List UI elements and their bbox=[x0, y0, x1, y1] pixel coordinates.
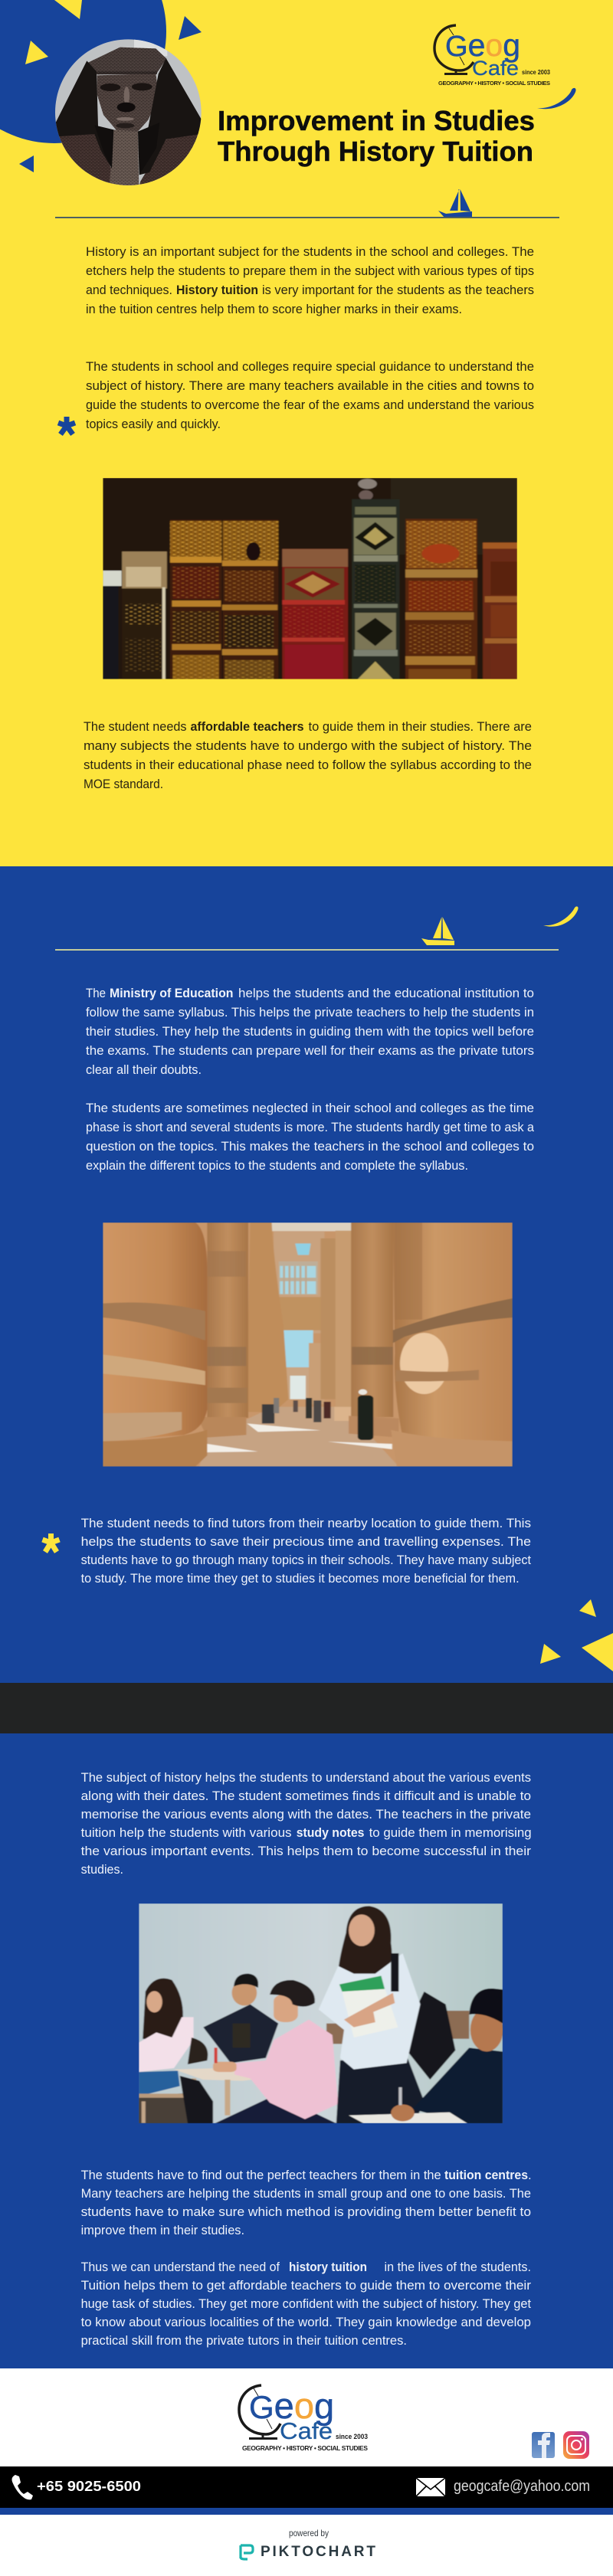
text: affordable teachers paragraph: The student needs bbox=[84, 720, 187, 734]
text: neglected students paragraph: phase is short and several students is more. The students hardly get time to ask a bbox=[86, 1121, 535, 1134]
text: tuition centres paragraph bbox=[81, 2168, 532, 2237]
decorative swoosh blue bbox=[537, 88, 576, 109]
text: intro paragraph 1: is very important for the students as the teachers bbox=[262, 283, 534, 297]
text: affordable teachers paragraph: affordable teachers bbox=[190, 720, 303, 734]
text: tuition centres paragraph: The students have to find out the perfect teachers for them in the bbox=[81, 2168, 441, 2182]
text: affordable teachers paragraph bbox=[84, 720, 532, 791]
sub: background chairs bbox=[326, 2010, 470, 2044]
blue footer stripe bbox=[0, 2508, 613, 2515]
sub: left woman bbox=[139, 1979, 199, 2123]
text: Ministry of Education paragraph: follow the same syllabus. This helps the private teachers to help the students in bbox=[86, 1006, 534, 1020]
text: nearby tutors paragraph: helps the students to save their precious time and travelling expenses. The bbox=[81, 1535, 531, 1549]
text: subject of history paragraph bbox=[81, 1771, 532, 1877]
divider line yellow section bbox=[55, 217, 559, 218]
panel: white credit area bbox=[0, 2515, 613, 2576]
text: subject of history paragraph: the various important events. This helps them to become successful in their bbox=[81, 1844, 532, 1858]
sub: book 5 bbox=[282, 549, 348, 679]
image: students in classroom bbox=[139, 1903, 503, 2123]
text: tuition centres paragraph: improve them in their studies. bbox=[81, 2224, 244, 2237]
text: intro paragraph 1: and techniques. bbox=[86, 283, 172, 297]
text: Ministry of Education paragraph: helps the students and the educational institution to bbox=[238, 987, 534, 1000]
text: subject of history paragraph: study notes bbox=[297, 1826, 365, 1840]
text: tuition centres paragraph: tuition centres bbox=[444, 2168, 528, 2182]
icon: instagram bbox=[563, 2431, 589, 2459]
text: Ministry of Education paragraph: Ministry of Education bbox=[110, 987, 233, 1000]
sub: book 6 bbox=[352, 499, 399, 679]
sub: desk bbox=[175, 2038, 251, 2123]
text: subject of history paragraph: to guide them in memorising bbox=[369, 1826, 532, 1840]
text: subject of history paragraph: along with their dates. The student sometimes finds it difficult and is unable to bbox=[81, 1789, 531, 1803]
sub: right man writing bbox=[349, 1988, 503, 2123]
divider line blue section bbox=[55, 949, 559, 951]
icon: facebook bbox=[532, 2432, 555, 2458]
image: Egyptian temple columns bbox=[103, 1223, 513, 1467]
text: conclusion paragraph bbox=[81, 2260, 532, 2348]
image: pharaoh statue in circle bbox=[54, 38, 205, 186]
sub: seated man bbox=[203, 1974, 278, 2063]
text: affordable teachers paragraph: to guide them in their studies. There are bbox=[308, 720, 532, 734]
text: neglected students paragraph: question on the topics. This makes the teachers in the school and colleges to bbox=[86, 1140, 534, 1154]
text: intro paragraph 2: topics easily and quickly. bbox=[86, 417, 221, 431]
text: intro paragraph 2: subject of history. There are many teachers available in the cities and towns to bbox=[86, 379, 534, 393]
logo: Geog Cafe footer: Cafe bbox=[280, 2417, 333, 2444]
text: conclusion paragraph: practical skill from the private tutors in their tuition centres. bbox=[81, 2334, 407, 2348]
sub: big right column bbox=[391, 1223, 513, 1467]
text: tuition centres paragraph: students have to make sure which method is providing them better benefit to bbox=[81, 2205, 531, 2219]
icon: blue sailboat bbox=[438, 189, 472, 218]
text: email: geogcafe@yahoo.com bbox=[454, 2478, 590, 2495]
image: antique books bbox=[103, 478, 517, 679]
logo: Geog Cafe footer: since 2003 bbox=[336, 2433, 368, 2441]
text: Ministry of Education paragraph: clear all their doubts. bbox=[86, 1063, 202, 1077]
decorative header shapes: blue circle and triangles bbox=[0, 0, 202, 172]
text: conclusion paragraph: in the lives of the students. bbox=[385, 2260, 531, 2274]
text: intro paragraph 1: History tuition bbox=[176, 283, 258, 297]
text: subject of history paragraph: memorise the various events along with the dates. The teachers in the private bbox=[81, 1808, 531, 1822]
title: Improvement in Studies bbox=[218, 105, 535, 136]
icon: blue asterisk bbox=[58, 417, 75, 434]
logo: Geog Cafe header: Geog bbox=[445, 28, 520, 63]
text: neglected students paragraph bbox=[86, 1101, 535, 1173]
sub: people bbox=[262, 1389, 373, 1440]
logo: Geog Cafe footer: GEOGRAPHY • HISTORY • SOCIAL STUDIES bbox=[242, 2444, 368, 2452]
sub: book 4 bbox=[222, 519, 278, 679]
text: subject of history paragraph: studies. bbox=[81, 1863, 123, 1877]
text: conclusion paragraph: huge task of studies. They get more confident with the subject of history. They get bbox=[81, 2297, 531, 2311]
text: Ministry of Education paragraph: The bbox=[86, 987, 106, 1000]
logo: Geog Cafe header: GEOGRAPHY • HISTORY • SOCIAL STUDIES bbox=[438, 80, 550, 87]
sub: book 7 bbox=[405, 519, 477, 679]
icon: yellow asterisk bbox=[43, 1533, 60, 1552]
text: intro paragraph 1 bbox=[86, 245, 534, 316]
logo: Piktochart: PIKTOCHART bbox=[261, 2544, 375, 2560]
logo: Geog Cafe footer: Geog bbox=[249, 2385, 334, 2426]
text: nearby tutors paragraph: students have to go through many topics in their schools. They have many subject bbox=[81, 1553, 531, 1567]
icon: yellow sailboat bbox=[421, 917, 454, 945]
sub: centre woman in pink bbox=[213, 1980, 338, 2123]
sub: standing woman with books and backpack bbox=[319, 1906, 455, 2123]
sub: book 3 bbox=[170, 519, 221, 679]
text: affordable teachers paragraph: MOE standard. bbox=[84, 777, 163, 791]
text: affordable teachers paragraph: students in their educational phase need to follow the syllabus according to the bbox=[84, 758, 532, 772]
dark band bbox=[0, 1683, 613, 1733]
panel: blue lower section bbox=[0, 1733, 613, 2368]
text: neglected students paragraph: explain the different topics to the students and complete the syllabus. bbox=[86, 1159, 468, 1173]
text: intro paragraph 1: History is an important subject for the students in the school and colleges. The bbox=[86, 245, 534, 259]
sub: left centre columns bbox=[198, 1223, 289, 1438]
text: conclusion paragraph: Tuition helps them to get affordable teachers to guide them to overcome their bbox=[81, 2279, 532, 2293]
text: conclusion paragraph: Thus we can understand the need of bbox=[81, 2260, 280, 2274]
icon: envelope bbox=[416, 2478, 445, 2496]
text: Ministry of Education paragraph bbox=[86, 987, 534, 1077]
text: tuition centres paragraph: . bbox=[528, 2168, 532, 2182]
text: neglected students paragraph: The students are sometimes neglected in their school and colleges as the time bbox=[86, 1101, 534, 1115]
text: tuition centres paragraph: Many teachers are helping the students in small group and one to one basis. The bbox=[81, 2187, 531, 2201]
logo: Geog Cafe header: since 2003 bbox=[522, 68, 550, 76]
decorative swoosh yellow bbox=[543, 906, 579, 927]
text: conclusion paragraph: history tuition bbox=[289, 2260, 367, 2274]
text: intro paragraph 2: The students in school and colleges require special guidance to understand the bbox=[86, 360, 534, 374]
text: nearby tutors paragraph: to study. The more time they get to studies it becomes more beneficial for them. bbox=[81, 1572, 520, 1586]
sub: book 2 bbox=[122, 552, 167, 679]
sub: right columns bbox=[309, 1223, 398, 1438]
text: phone number: +65 9025-6500 bbox=[37, 2479, 141, 2494]
panel: black contact bar bbox=[0, 2466, 613, 2508]
panel: blue middle section bbox=[0, 866, 613, 1683]
text: nearby tutors paragraph: The student needs to find tutors from their nearby location to guide them. This bbox=[81, 1517, 531, 1530]
panel: yellow intro section bbox=[0, 0, 613, 866]
text: nearby tutors paragraph bbox=[81, 1517, 531, 1586]
text: Ministry of Education paragraph: their studies. They help the students in guiding them with the topics well before bbox=[86, 1025, 534, 1039]
sub: big left column bbox=[103, 1223, 207, 1467]
text: subject of history paragraph: tuition help the students with various bbox=[81, 1826, 292, 1840]
panel: white footer logo area bbox=[0, 2368, 613, 2466]
title: Through History Tuition bbox=[218, 136, 533, 167]
text: Ministry of Education paragraph: the exams. The students can prepare well for their exams as the private tutors bbox=[86, 1044, 534, 1058]
text: conclusion paragraph: to know about various localities of the world. They gain knowledge and develop bbox=[81, 2316, 531, 2329]
text: powered by: powered by bbox=[289, 2528, 329, 2538]
logo: Geog Cafe footer bbox=[239, 2385, 368, 2452]
text: intro paragraph 2: guide the students to overcome the fear of the exams and understand the various bbox=[86, 398, 534, 412]
text: subject of history paragraph: The subject of history helps the students to understand about the various events bbox=[81, 1771, 531, 1785]
text: intro paragraph 1: in the tuition centres help them to score higher marks in their exams. bbox=[86, 303, 462, 316]
text: intro paragraph 1: etchers help the students to prepare them in the subject with various types of tips bbox=[86, 264, 534, 278]
icon: phone bbox=[12, 2475, 33, 2499]
text: affordable teachers paragraph: many subjects the students have to undergo with the subject of history. The bbox=[84, 739, 532, 753]
decorative yellow triangles bbox=[540, 1599, 613, 1671]
sub: book 8 bbox=[483, 542, 517, 679]
title bbox=[218, 105, 535, 167]
sub: book 1 bbox=[103, 571, 122, 679]
logo: Geog Cafe header bbox=[434, 25, 550, 87]
text: intro paragraph 2 bbox=[86, 360, 534, 431]
logo: Geog Cafe header: Cafe bbox=[472, 57, 519, 80]
